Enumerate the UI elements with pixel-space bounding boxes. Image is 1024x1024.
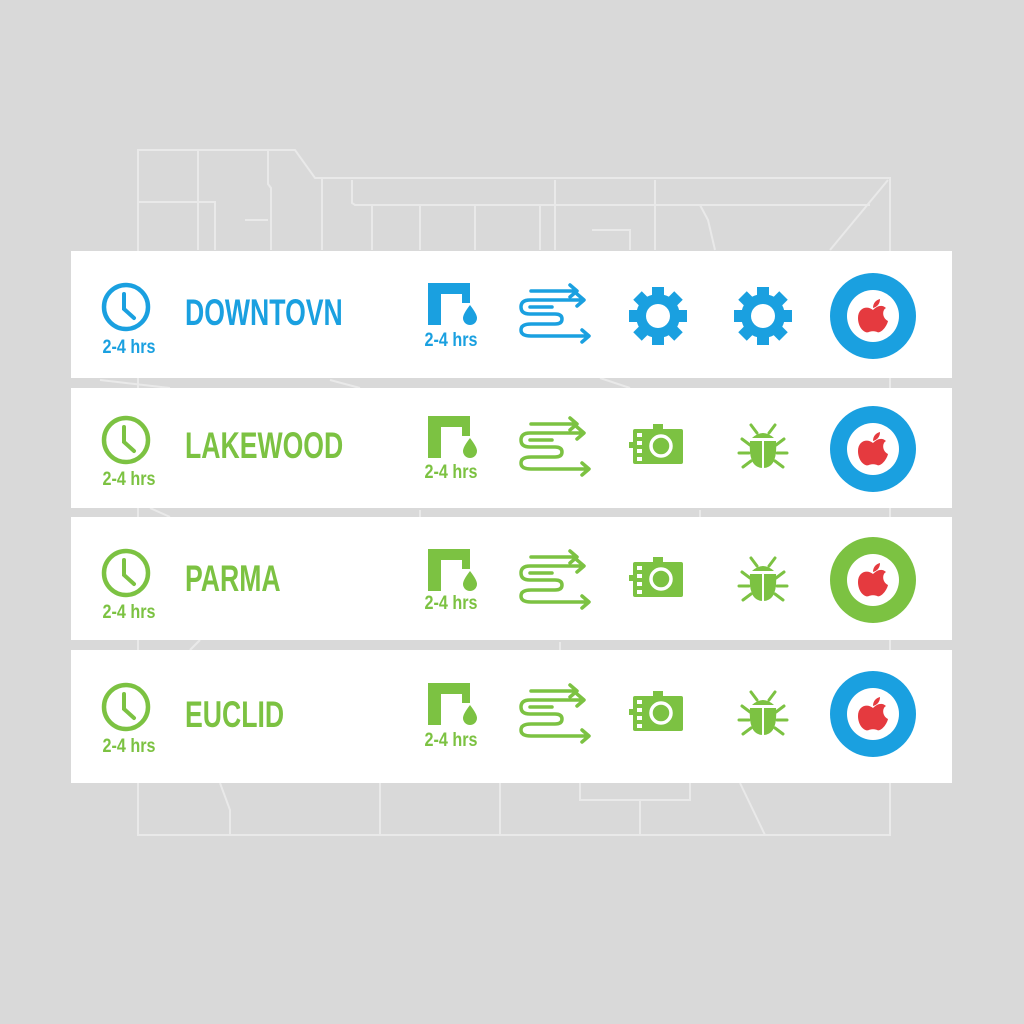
time label: 2-4 hrs <box>103 735 156 756</box>
icon: faucet <box>428 283 477 325</box>
row 3 content <box>103 537 916 623</box>
time label: 2-4 hrs <box>103 468 156 489</box>
row 1 content <box>103 273 916 359</box>
icon: faucet <box>428 416 477 458</box>
icon: clock <box>104 285 148 329</box>
icon: gear 2 <box>734 287 792 345</box>
row 3 panel: parma <box>71 517 952 640</box>
time label: 2-4 hrs <box>103 336 156 357</box>
icon: wavy arrows <box>521 285 589 342</box>
icon: camera <box>629 424 683 464</box>
row 2 content <box>103 406 916 492</box>
icon: faucet <box>428 683 477 725</box>
icon: apple badge <box>830 406 916 492</box>
name: lakewood: LAKEWOOD <box>185 425 343 466</box>
row 4 panel: euclid <box>71 650 952 783</box>
time label: 2-4 hrs <box>103 601 156 622</box>
icon: clock <box>104 685 148 729</box>
icon: clock <box>104 551 148 595</box>
icon: camera <box>629 557 683 597</box>
row 2 content: 2-4 hrs <box>425 461 478 482</box>
name: euclid: EUCLID <box>185 694 284 735</box>
icon: bug <box>739 692 787 735</box>
icon: apple badge <box>830 273 916 359</box>
row 4 content: 2-4 hrs <box>425 729 478 750</box>
icon: bug <box>739 425 787 468</box>
icon: gear 1 <box>629 287 687 345</box>
row 1 panel: downtown <box>71 251 952 378</box>
row 1 content: 2-4 hrs <box>425 329 478 350</box>
icon: clock <box>104 418 148 462</box>
row 2 panel: lakewood <box>71 388 952 508</box>
icon: bug <box>739 558 787 601</box>
icon: camera <box>629 691 683 731</box>
icon: wavy arrows <box>521 551 589 608</box>
icon: apple badge (green) <box>830 537 916 623</box>
icon: apple badge <box>830 671 916 757</box>
row 3 content: 2-4 hrs <box>425 592 478 613</box>
row 4 content <box>103 671 916 757</box>
icon: wavy arrows <box>521 418 589 475</box>
name: downtown: DOWNTOVN <box>185 292 343 333</box>
icon: wavy arrows <box>521 685 589 742</box>
name: parma: PARMA <box>185 558 281 599</box>
icon: faucet <box>428 549 477 591</box>
